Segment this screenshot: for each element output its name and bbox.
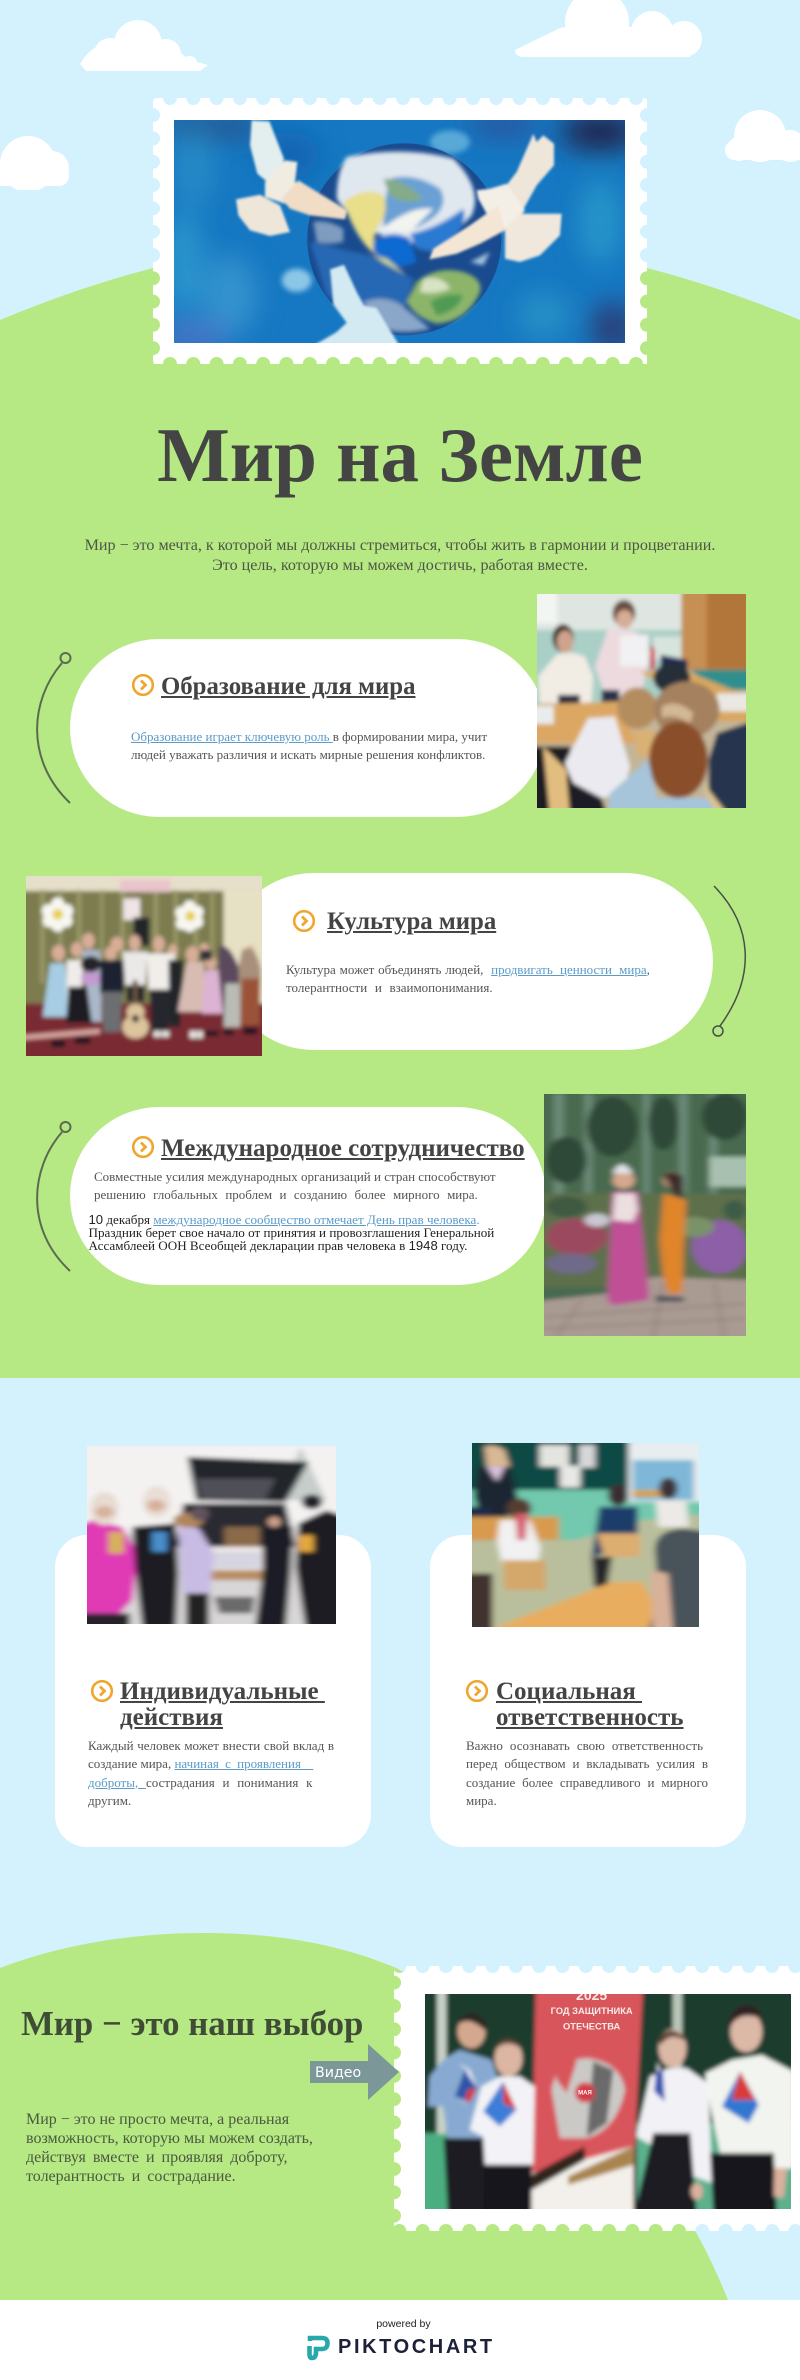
text: individual actions: Каждый человек может внести свой вклад в — [88, 1738, 334, 1753]
text: culture — [286, 962, 650, 995]
photo: four students with flags: ГОД ЗАЩИТНИКА — [551, 2006, 633, 2016]
closing text: толерантность и сострадание. — [26, 2168, 236, 2185]
icon: chevron circle — [132, 1136, 154, 1158]
heading: international cooperation: Международное сотрудничество — [161, 1135, 525, 1162]
heading: social responsibility: Социальная — [496, 1678, 636, 1705]
heading: individual actions: действия — [120, 1704, 223, 1731]
closing text — [26, 2110, 313, 2185]
photo: four students with flags — [425, 1994, 791, 2209]
text: cooperation: Совместные усилия международных организаций и стран способствуют — [94, 1169, 496, 1184]
icon: chevron circle — [132, 674, 154, 696]
text: social responsibility: мира. — [466, 1793, 497, 1808]
heading: social responsibility — [496, 1678, 684, 1731]
icon: chevron circle — [466, 1680, 488, 1702]
footer: piktochart wordmark: PIKTOCHART — [338, 2336, 495, 2358]
text: social responsibility: создание более справедливого и мирного — [466, 1775, 708, 1790]
closing text: возможность, которую мы можем создать, — [26, 2130, 313, 2147]
intro text — [85, 537, 715, 574]
text: individual actions — [88, 1738, 334, 1808]
text: social responsibility — [466, 1738, 708, 1808]
heading: social responsibility: ответственность — [496, 1704, 684, 1731]
text: human rights day — [88, 1212, 494, 1252]
photo: group of children on stage — [26, 876, 262, 1056]
text: human rights day: Праздник берет свое начало от принятия и провозглашения Генеральной — [88, 1224, 494, 1240]
panel: social responsibility — [430, 1535, 746, 1847]
text: human rights day: Ассамблеей ООН Всеобщей декларации прав человека в 1948 году. — [88, 1238, 467, 1252]
heading: education: Образование для мира — [161, 673, 415, 700]
photo: two girls in costumes in a garden — [544, 1094, 746, 1336]
heading: culture: Культура мира — [327, 908, 496, 935]
icon: chevron circle — [292, 910, 316, 932]
photo: earth with doves — [174, 120, 625, 343]
text: human rights day: 10 декабря международное сообщество отмечает День прав человека. — [88, 1212, 480, 1226]
text: culture: толерантности и взаимопонимания. — [286, 980, 493, 995]
intro text: Это цель, которую мы можем достичь, работая вместе. — [212, 556, 588, 574]
icon: piktochart logo — [307, 2336, 330, 2360]
intro text: Мир − это мечта, к которой мы должны стремиться, чтобы жить в гармонии и процветании. — [85, 537, 715, 554]
heading: individual actions — [120, 1678, 325, 1731]
closing text: Мир − это не просто мечта, а реальная — [26, 2110, 289, 2128]
heading: peace is our choice: Мир − это наш выбор — [21, 2004, 363, 2043]
photo: four students with flags: ОТЕЧЕСТВА — [563, 2021, 621, 2031]
closing text: действуя вместе и проявляя доброту, — [26, 2149, 287, 2166]
icon: chevron circle — [90, 1680, 114, 1702]
text: individual actions: доброты, сострадания и понимания к — [88, 1775, 312, 1790]
heading: individual actions: Индивидуальные — [120, 1678, 319, 1705]
stamp frame with group photo — [394, 1966, 800, 2231]
panel: international cooperation — [70, 1107, 546, 1285]
text: education: Образование играет ключевую роль в формировании мира, учит — [131, 729, 487, 744]
photo: classroom with projector — [472, 1443, 699, 1627]
photo: four students with flags: МАЯ — [578, 2091, 592, 2097]
title: Мир на Земле — [157, 412, 643, 498]
text: individual actions: создание мира, начиная с проявления — [88, 1756, 301, 1771]
text: social responsibility: перед обществом и вкладывать усилия в — [466, 1756, 708, 1771]
panel: individual actions — [55, 1535, 371, 1847]
text: cooperation: решению глобальных проблем и созданию более мирного мира. — [94, 1187, 478, 1202]
panel: culture — [225, 873, 713, 1050]
footer: powered by: powered by — [376, 2318, 431, 2330]
stamp frame with earth photo — [153, 98, 647, 364]
text: education — [131, 729, 487, 762]
decorative arc: card 1 — [36, 652, 72, 804]
clouds — [0, 0, 800, 190]
arrow label: Видео — [315, 2065, 361, 2081]
decorative arc: card 3 — [36, 1121, 72, 1272]
text: individual actions: другим. — [88, 1793, 131, 1808]
text: culture: Культура может объединять людей, продвигать ценности мира, — [286, 962, 650, 977]
photo: classroom presentation — [537, 594, 746, 808]
text: education: людей уважать различия и искать мирные решения конфликтов. — [131, 747, 485, 762]
text: social responsibility: Важно осознавать свою ответственность — [466, 1738, 703, 1753]
panel: education — [70, 639, 546, 817]
photo: volunteers by a car in snow — [87, 1446, 336, 1624]
arrow: video — [310, 2044, 399, 2100]
text: cooperation — [94, 1169, 496, 1202]
decorative arc: card 2 — [712, 886, 746, 1037]
